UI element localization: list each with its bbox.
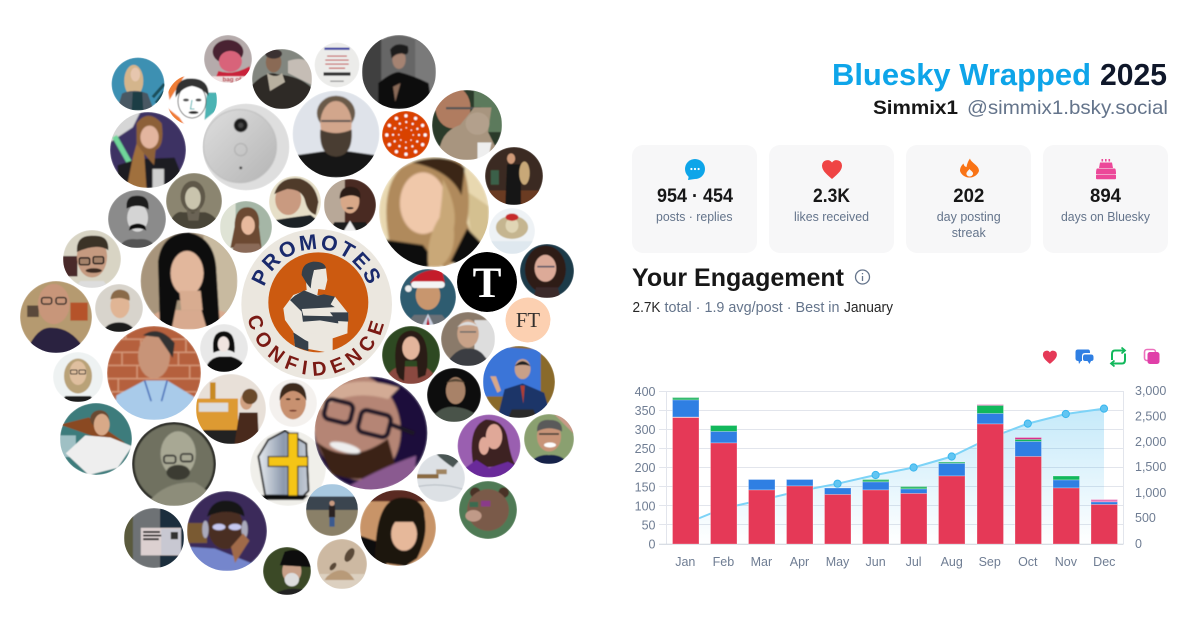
month labels: Sep: [979, 555, 1001, 569]
avatar: bearded man with glasses: [292, 90, 380, 178]
stacked bars: [672, 398, 1118, 544]
avatar: large selfie of blonde woman: [379, 157, 489, 267]
right axis labels: 1,500: [1135, 460, 1166, 474]
avatar: white poster: [314, 42, 360, 88]
avatar: man on white background: [269, 379, 317, 427]
engagement summary: January: [844, 300, 894, 316]
avatar: woman with short dark hair: [269, 176, 321, 228]
left axis labels: 300: [635, 423, 656, 437]
avatar: man on couch: [252, 49, 312, 109]
left axis labels: 350: [635, 404, 656, 418]
bar: Mar: [748, 480, 775, 544]
avatar: large smiling man with thick glasses: [306, 368, 428, 492]
right axis labels: 2,000: [1135, 435, 1166, 449]
title: Bluesky Wrapped: [832, 57, 1091, 92]
avatar: man by brick wall: [107, 326, 201, 420]
bar: Dec: [1091, 500, 1118, 544]
line data points: [834, 405, 1108, 487]
avatar: NYT logo: T: [473, 260, 502, 307]
avatar: engraving of bearded man: [166, 173, 222, 229]
right axis labels: 1,000: [1135, 486, 1166, 500]
right axis labels: 0: [1135, 537, 1142, 551]
avatar: blonde woman with glasses: [53, 352, 103, 402]
avatar: man with headphones: [187, 491, 267, 571]
month labels: Apr: [790, 555, 809, 569]
avatar: Promotes Confidence badge: [241, 229, 392, 380]
right axis labels: [1135, 384, 1166, 551]
avatar: man suit with moustache: [324, 179, 376, 231]
panel: stat likes received: [769, 145, 894, 253]
avatar: woman holding plush: [485, 147, 543, 205]
avatar: person in black blazer: [362, 35, 436, 109]
icon: quote copy squares: [1144, 350, 1160, 364]
avatar: smiling man with glasses: [524, 414, 574, 464]
avatar: man with moustache: [108, 190, 166, 248]
panel: stat posting streak: day posting: [937, 209, 1001, 224]
month labels: Nov: [1055, 555, 1078, 569]
left axis labels: [635, 385, 656, 552]
left axis labels: 200: [635, 461, 656, 475]
avatar: mitre with yellow cross: [250, 430, 326, 506]
engagement summary: total · 1.9 avg/post · Best in: [664, 300, 840, 316]
avatar: young man in black: [95, 284, 143, 332]
avatar: grey haired man: [441, 312, 495, 366]
avatar: cartoon face: [167, 75, 217, 125]
avatar: street poster: [124, 508, 184, 568]
avatar: bear with sunglasses: [459, 481, 517, 539]
handle: @simmix1.bsky.social: [967, 97, 1168, 119]
left axis labels: 100: [635, 500, 656, 514]
avatar: orange dotted logo: [382, 111, 430, 159]
avatar: woman with dark curly hair: [520, 244, 574, 298]
avatar: snowy cabin: [417, 454, 465, 502]
left axis labels: 150: [635, 480, 656, 494]
avatar: man holding cat: [432, 86, 502, 160]
avatar: FT logo: FT: [516, 310, 540, 332]
icon: heart: [822, 160, 842, 179]
month labels: Dec: [1093, 555, 1115, 569]
avatar: redhead woman: [110, 112, 186, 188]
bar: May: [824, 488, 851, 544]
cumulative line: [685, 409, 1104, 524]
avatar: woman in foliage: [382, 326, 440, 384]
avatar: FT logo: [506, 298, 550, 342]
icon: info: [856, 270, 870, 284]
panel: stat likes received: 2.3K: [813, 186, 850, 207]
panel: stat likes received: likes received: [794, 209, 869, 224]
bar: Jan: [672, 398, 699, 544]
left axis labels: 50: [642, 518, 656, 532]
avatar: man in santa hat: [400, 269, 456, 325]
avatar: tintype portrait: [132, 422, 216, 506]
panel: avatar bubble cluster: [20, 35, 574, 595]
month labels: Jan: [675, 555, 695, 569]
panel: stat posting streak: streak: [952, 225, 986, 240]
month labels: Jul: [906, 555, 922, 569]
avatar: man in black hat: [263, 547, 311, 595]
avatar: pinup illustration: [204, 35, 252, 84]
month labels: Mar: [751, 555, 772, 569]
bar: Feb: [710, 426, 737, 544]
bar: Apr: [786, 480, 813, 544]
avatar: pinup illustration: bag of: [222, 77, 242, 84]
left axis labels: 400: [635, 385, 656, 399]
avatar: polar bear in santa hat: [489, 208, 535, 254]
avatar: Promotes Confidence badge: PROMOTES: [251, 234, 380, 286]
right axis labels: 3,000: [1135, 384, 1166, 398]
title year: 2025: [1100, 57, 1167, 92]
right axis labels: 500: [1135, 511, 1156, 525]
bar: Oct: [1015, 438, 1042, 544]
avatar: black and white woman: [200, 324, 248, 372]
icon: likes heart: [1043, 351, 1057, 364]
engagement summary: 2.7K: [632, 300, 661, 316]
left axis labels: 250: [635, 442, 656, 456]
avatar: man by orange truck: [196, 374, 266, 444]
heading: your engagement: Your Engagement: [632, 264, 845, 292]
avatar: speaker at podium: [483, 346, 555, 418]
avatar: bird on rock: [317, 539, 367, 589]
panel: stat days on Bluesky: [1043, 145, 1168, 253]
avatar: man with dark glasses: [63, 230, 121, 288]
legend icons: [1043, 348, 1160, 366]
avatar: woman with long hair: [220, 201, 272, 253]
month labels: Oct: [1018, 555, 1038, 569]
icon: birthday cake: [1096, 159, 1116, 179]
avatar: woman with long black hair: [140, 232, 238, 330]
avatar: Promotes Confidence badge: CONFIDENCE: [248, 316, 384, 376]
display name: Simmix1: [873, 97, 958, 119]
panel: stat posts and replies: 954 · 454: [657, 186, 733, 207]
icon: flame: [960, 158, 979, 178]
bar: Jun: [862, 480, 889, 544]
month labels: May: [826, 555, 850, 569]
icon: repost arrows: [1111, 348, 1125, 366]
avatar: woman in white shirt: [60, 403, 132, 475]
panel: stat days on Bluesky: days on Bluesky: [1061, 209, 1150, 224]
bar: Sep: [977, 404, 1004, 544]
month labels: Feb: [713, 555, 734, 569]
month labels: Aug: [941, 555, 963, 569]
avatar: blonde woman: [112, 58, 164, 110]
panel: stat posts and replies: [632, 145, 757, 253]
avatar: woman on purple background: [458, 414, 520, 478]
panel: stat posts and replies: posts · replies: [656, 209, 733, 224]
bar: Jul: [900, 486, 927, 544]
chart: monthly engagement stacked bars with cumulative line: [635, 384, 1166, 569]
right axis labels: 2,500: [1135, 410, 1166, 424]
avatar: white smart camera: [202, 104, 290, 190]
bar: Nov: [1053, 476, 1080, 544]
avatar: man on black background: [427, 368, 481, 422]
cumulative area: [685, 409, 1104, 544]
icon: replies bubbles: [1076, 350, 1094, 364]
avatar: person in field: [306, 484, 358, 536]
bar: Aug: [938, 462, 965, 544]
avatar: smiling woman with black bangs: [360, 490, 436, 566]
month labels: Jun: [866, 555, 886, 569]
panel: stat days on Bluesky: 894: [1090, 186, 1121, 207]
month labels: [675, 555, 1115, 569]
engagement summary: [632, 300, 894, 316]
left axis labels: 0: [649, 538, 656, 552]
avatar: NYT logo: [457, 252, 517, 312]
icon: speech bubble: [685, 159, 705, 180]
panel: stat posting streak: 202: [953, 186, 984, 207]
avatar: man with round glasses: [20, 281, 92, 353]
panel: stat posting streak: [906, 145, 1031, 253]
